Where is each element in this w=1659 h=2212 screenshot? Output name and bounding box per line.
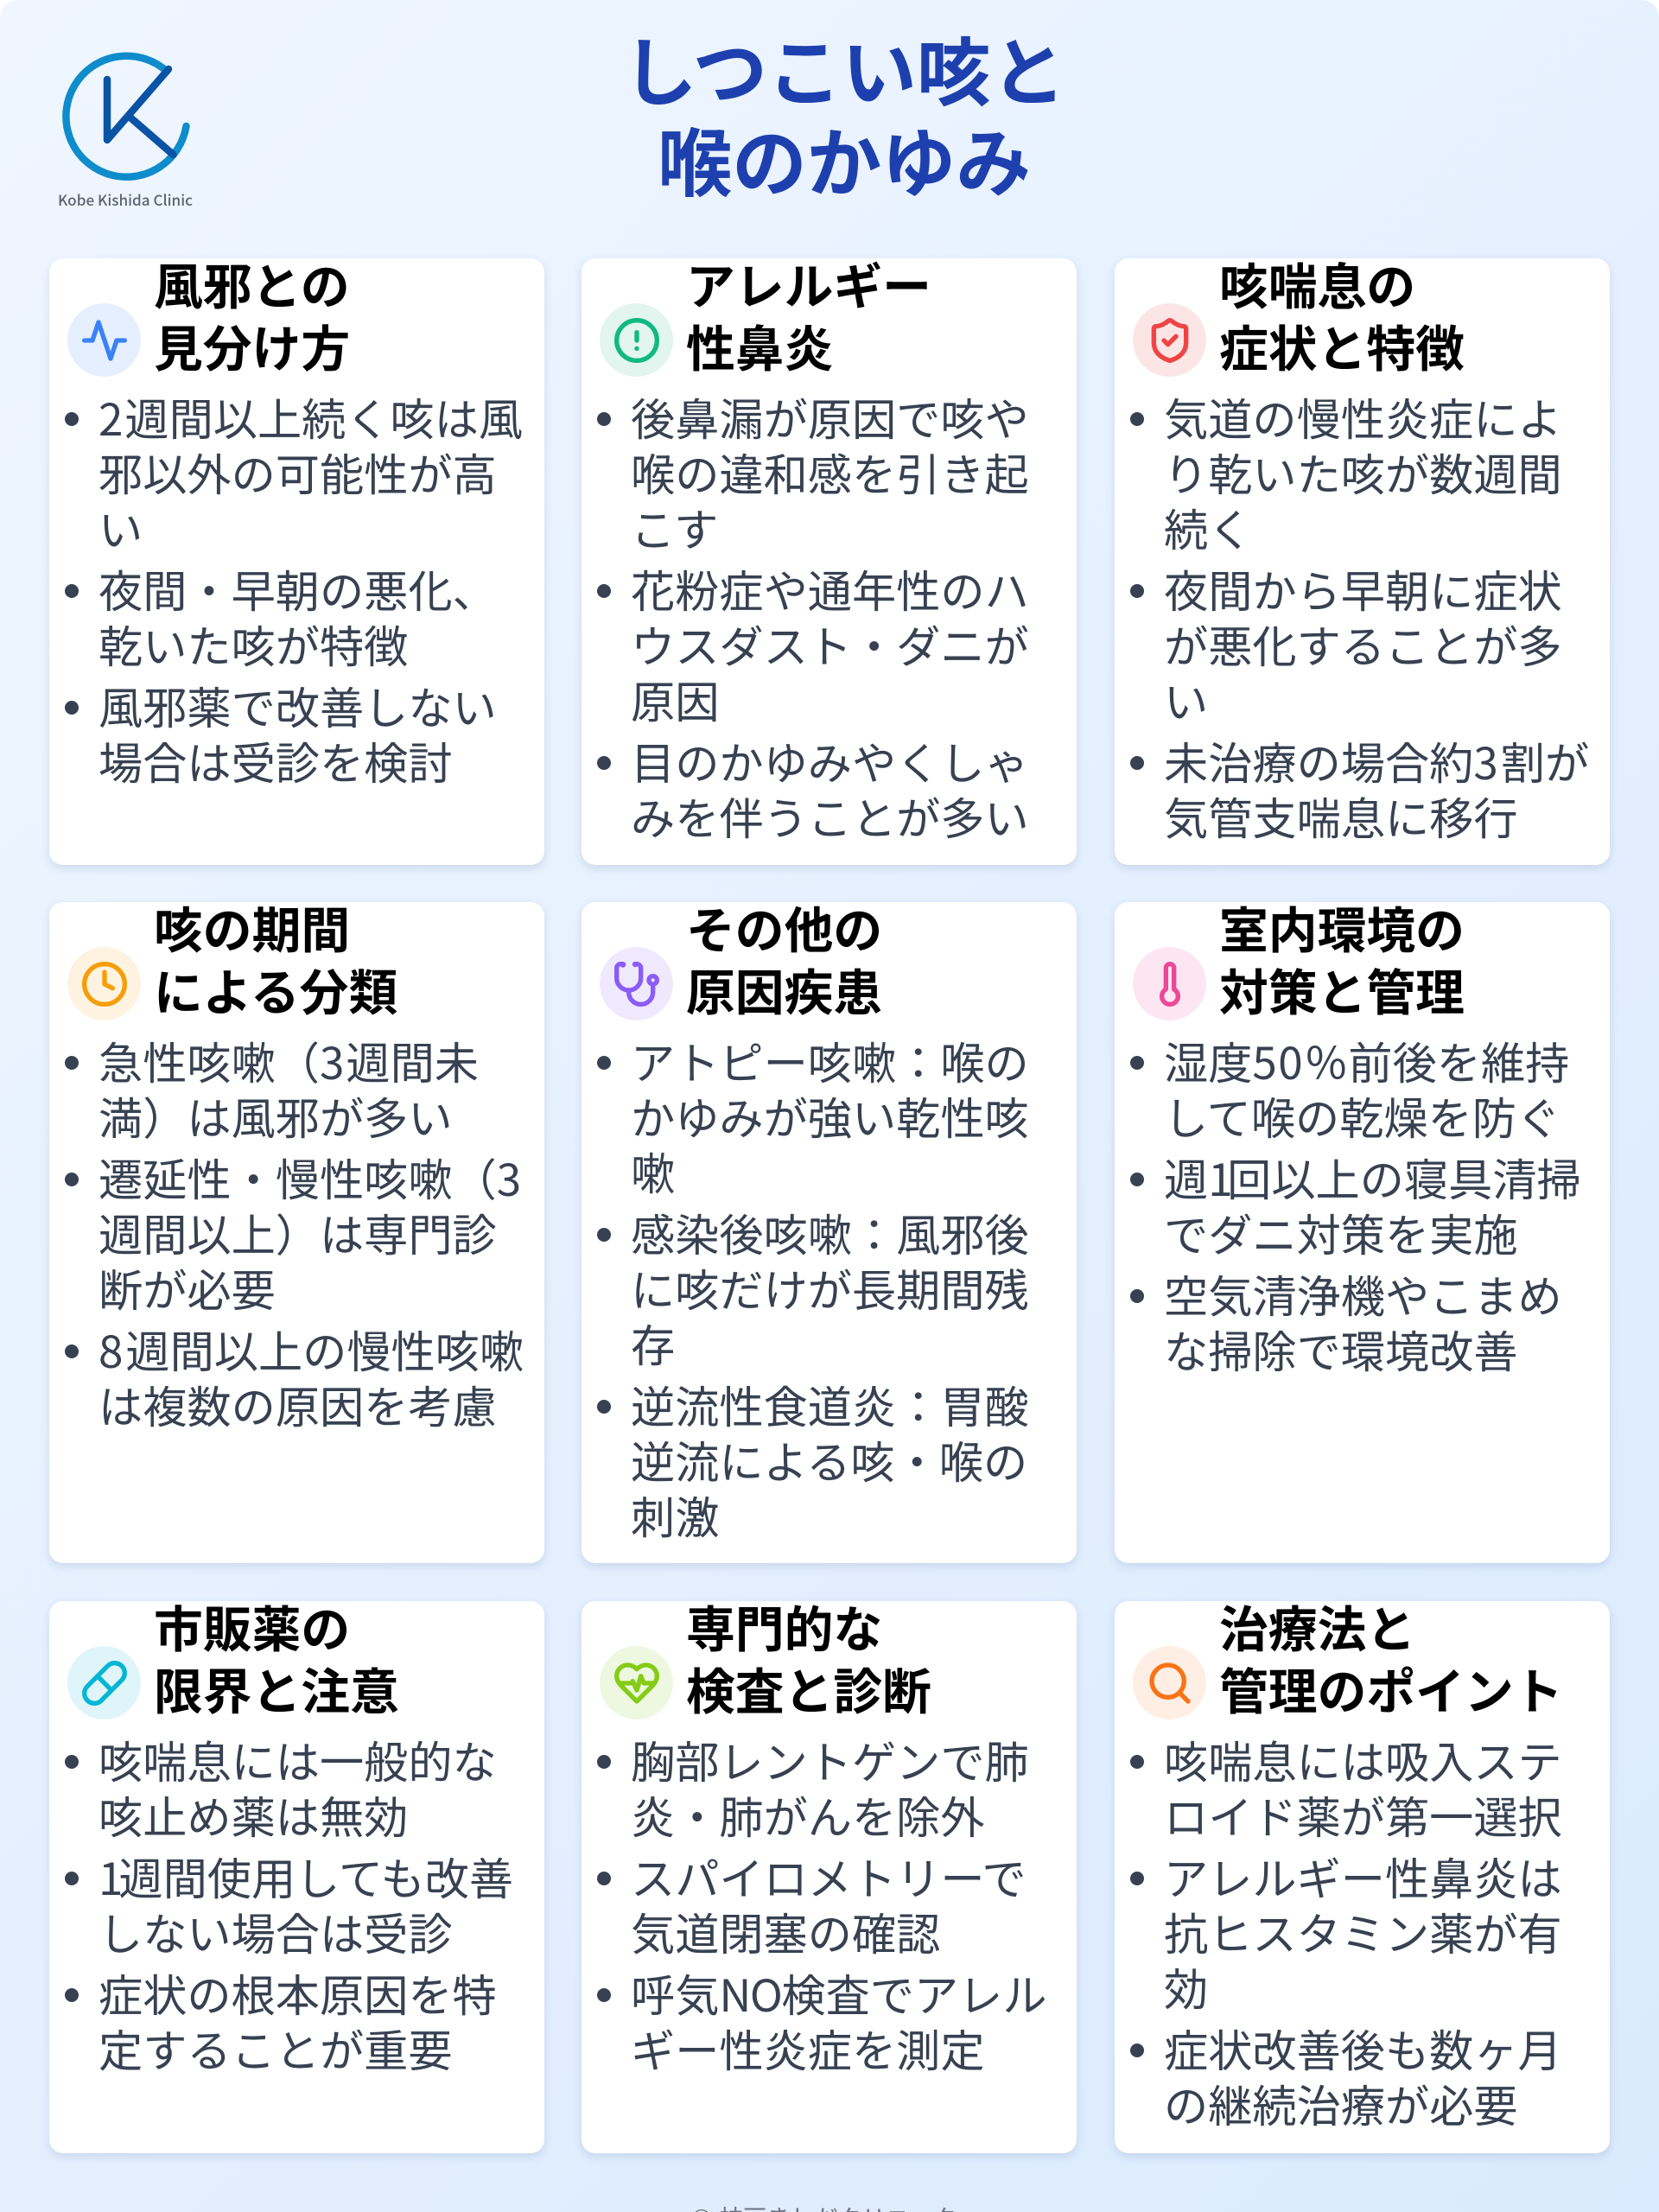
heading — [686, 248, 931, 381]
bullet list: 抗ヒスタミン薬が有 — [1164, 1899, 1562, 1963]
bullet list: な掃除で環境改善 — [1164, 1317, 1518, 1381]
bullet list: 急性咳嗽（3週間未 — [99, 1028, 479, 1092]
bullet list: 効 — [1164, 1955, 1208, 2018]
bullet list: 2週間以上続く咳は風 — [99, 385, 523, 448]
bullet list: に咳だけが長期間残 — [631, 1255, 1029, 1319]
panel: 専門的な検査と診断 — [582, 1601, 1077, 2153]
bullet list: かゆみが強い乾性咳 — [631, 1084, 1029, 1147]
bullet list: こす — [631, 495, 718, 559]
icon: heart pulse — [600, 1646, 673, 1719]
heading: による分類 — [154, 954, 397, 1025]
heading — [1219, 892, 1465, 1025]
bullet list: 遷延性・慢性咳嗽（3 — [99, 1145, 521, 1209]
bullet list: 気道閉塞の確認 — [631, 1899, 940, 1963]
panel: 室内環境の対策と管理 — [1115, 902, 1610, 1563]
bullet list: 逆流による咳・喉の — [631, 1427, 1027, 1491]
bullet list: 乾いた咳が特徴 — [99, 612, 408, 676]
bullet list: 炎・肺がんを除外 — [631, 1783, 985, 1847]
heading: 見分け方 — [154, 310, 350, 381]
bullet list: 未治療の場合約3割が — [1164, 728, 1589, 792]
heading — [154, 1591, 399, 1724]
bullet list — [65, 385, 523, 792]
heading: 性鼻炎 — [686, 310, 833, 381]
bullet list: 夜間・早朝の悪化、 — [99, 556, 497, 620]
bullet list: 症状の根本原因を特 — [99, 1961, 497, 2024]
bullet list: 空気清浄機やこまめ — [1164, 1262, 1562, 1325]
icon: pill — [67, 1646, 141, 1719]
heading — [686, 1591, 931, 1724]
heading: 管理のポイント — [1219, 1653, 1563, 1724]
bullet list: 気管支喘息に移行 — [1164, 784, 1518, 848]
panel: 市販薬の限界と注意 — [49, 1601, 544, 2153]
bullet list: ロイド薬が第一選択 — [1164, 1783, 1562, 1847]
icon: shield check — [1133, 303, 1206, 377]
panel: 風邪との見分け方 — [49, 258, 544, 865]
bullet list: 邪以外の可能性が高 — [99, 440, 497, 504]
bullet list — [597, 385, 1029, 848]
bullet list: 1週間使用しても改善 — [99, 1844, 513, 1908]
title: 喉のかゆみ — [658, 104, 1031, 212]
bullet list: 咳喘息には吸入ステ — [1164, 1727, 1562, 1791]
panel: その他の原因疾患 — [582, 902, 1077, 1563]
panel: 治療法と管理のポイント — [1115, 1601, 1610, 2153]
heading: 市販薬の — [154, 1591, 350, 1662]
bullet list: 後鼻漏が原因で咳や — [631, 385, 1029, 448]
bullet list: の継続治療が必要 — [1164, 2071, 1518, 2135]
logo — [58, 52, 193, 210]
bullet list: 風邪薬で改善しない — [99, 673, 497, 737]
bullet list — [1130, 385, 1589, 848]
bullet list: 胸部レントゲンで肺 — [631, 1727, 1029, 1791]
heading — [686, 892, 882, 1025]
bullet list: 断が必要 — [99, 1255, 276, 1319]
heading — [1219, 248, 1465, 381]
bullet list: 咳喘息には一般的な — [99, 1727, 497, 1791]
bullet list — [1130, 1028, 1581, 1381]
bullet list: して喉の乾燥を防ぐ — [1164, 1084, 1560, 1147]
bullet list: 原因 — [631, 667, 719, 731]
panel: 咳喘息の症状と特徴 — [1115, 258, 1610, 865]
bullet list: ギー性炎症を測定 — [631, 2016, 985, 2080]
bullet list: 呼気NO検査でアレル — [631, 1961, 1047, 2024]
bullet list: が悪化することが多 — [1164, 612, 1562, 676]
bullet list: 嗽 — [631, 1139, 675, 1203]
bullet list: 夜間から早朝に症状 — [1164, 556, 1562, 620]
bullet list: みを伴うことが多い — [631, 784, 1029, 848]
icon: activity — [67, 303, 141, 377]
bullet list: 逆流性食道炎：胃酸 — [631, 1372, 1029, 1436]
bullet list: 刺激 — [631, 1483, 719, 1547]
icon: search — [1133, 1646, 1206, 1719]
bullet list: 感染後咳嗽：風邪後 — [631, 1200, 1029, 1264]
heading — [154, 248, 350, 381]
icon: clock — [67, 947, 141, 1020]
bullet list: スパイロメトリーで — [631, 1844, 1027, 1908]
heading — [1219, 1591, 1563, 1724]
title — [622, 13, 1066, 212]
panel: 咳の期間による分類 — [49, 902, 544, 1563]
bullet list — [597, 1028, 1029, 1547]
heading: 咳喘息の — [1219, 248, 1415, 319]
bullet list — [65, 1727, 513, 2080]
heading: 対策と管理 — [1219, 954, 1465, 1025]
heading: 治療法と — [1219, 1591, 1415, 1662]
bullet list: でダニ対策を実施 — [1164, 1200, 1518, 1264]
bullet list: 満）は風邪が多い — [99, 1084, 453, 1147]
bullet list: しない場合は受診 — [99, 1899, 453, 1963]
bullet list: 喉の違和感を引き起 — [631, 440, 1029, 504]
heading: 検査と診断 — [686, 1653, 931, 1724]
bullet list: 咳止め薬は無効 — [99, 1783, 408, 1847]
bullet list: い — [99, 495, 143, 559]
bullet list: 花粉症や通年性のハ — [631, 556, 1029, 620]
heading: 症状と特徴 — [1219, 310, 1465, 381]
bullet list: は複数の原因を考慮 — [99, 1372, 497, 1436]
bullet list — [597, 1727, 1047, 2080]
heading: 室内環境の — [1219, 892, 1465, 963]
heading: アレルギー — [686, 248, 931, 319]
bullet list — [65, 1028, 524, 1436]
bullet list: 場合は受診を検討 — [99, 728, 453, 792]
bullet list: アトピー咳嗽：喉の — [631, 1028, 1029, 1092]
title: しつこい咳と — [622, 13, 1066, 121]
heading: 限界と注意 — [154, 1653, 399, 1724]
bullet list: 症状改善後も数ヶ月 — [1164, 2016, 1562, 2080]
heading: 専門的な — [686, 1591, 882, 1662]
bullet list: り乾いた咳が数週間 — [1164, 440, 1562, 504]
heading: その他の — [686, 892, 882, 963]
bullet list: 定することが重要 — [99, 2016, 453, 2080]
heading — [154, 892, 397, 1025]
bullet list: い — [1164, 667, 1208, 731]
bullet list: 気道の慢性炎症によ — [1164, 385, 1562, 448]
logo: Kobe Kishida Clinic — [58, 188, 193, 210]
icon: stethoscope — [600, 947, 673, 1020]
bullet list: 週1回以上の寝具清掃 — [1164, 1145, 1581, 1209]
panel: アレルギー性鼻炎 — [582, 258, 1077, 865]
heading: 風邪との — [154, 248, 350, 319]
bullet list: アレルギー性鼻炎は — [1164, 1844, 1562, 1908]
icon: alert circle — [600, 303, 673, 377]
bullet list: 湿度50％前後を維持 — [1164, 1028, 1569, 1092]
heading: 咳の期間 — [154, 892, 350, 963]
bullet list: 8週間以上の慢性咳嗽 — [99, 1317, 524, 1381]
bullet list: 目のかゆみやくしゃ — [631, 728, 1029, 792]
bullet list: 続く — [1164, 495, 1252, 559]
bullet list: ウスダスト・ダニが — [631, 612, 1029, 676]
bullet list: 存 — [631, 1311, 675, 1375]
icon: thermometer — [1133, 947, 1206, 1020]
bullet list: 週間以上）は専門診 — [99, 1200, 497, 1264]
heading: 原因疾患 — [686, 954, 882, 1025]
bullet list — [1130, 1727, 1562, 2135]
